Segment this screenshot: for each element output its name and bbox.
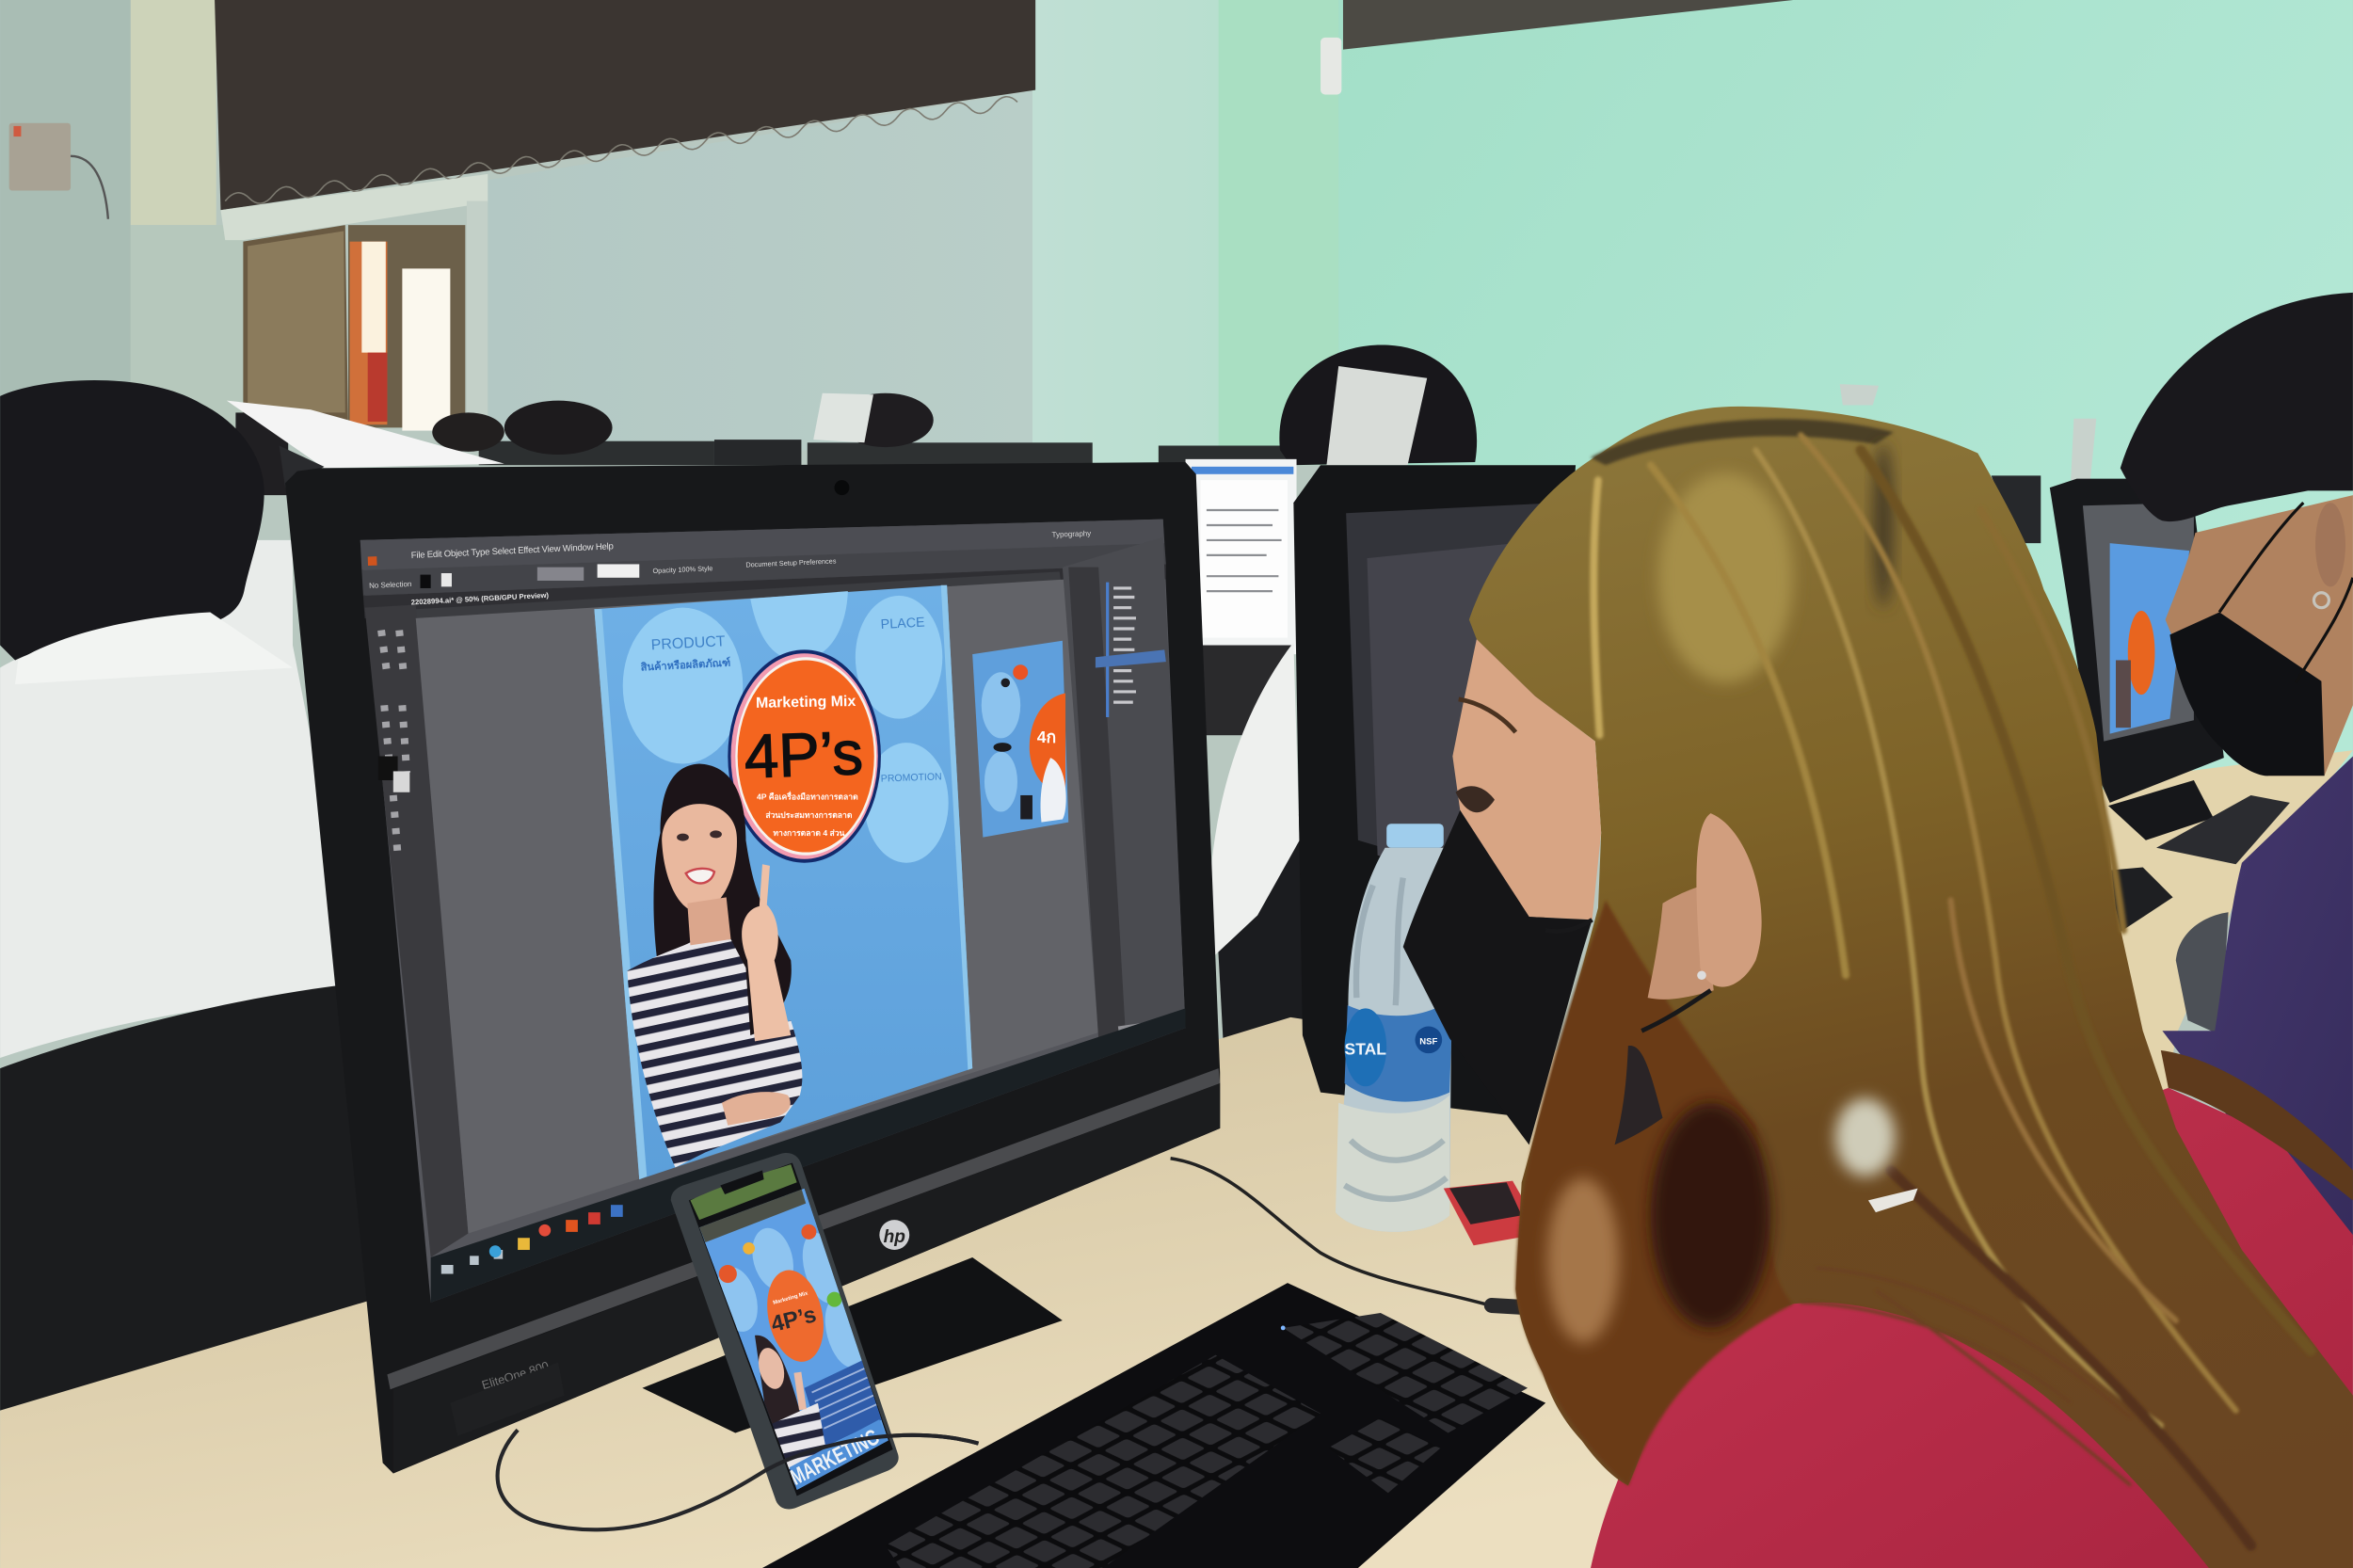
back heads <box>432 393 934 455</box>
webcam <box>835 480 849 495</box>
model label: EliteOne 800 <box>480 1358 551 1392</box>
circle: top <box>750 591 848 660</box>
hair strands <box>1593 435 2311 1545</box>
dark reddish lower lock <box>1515 901 1793 1485</box>
orange 4P's badge: ทางการตลาด 4 ส่วน <box>773 828 845 838</box>
wall beam and door frame <box>220 174 488 426</box>
woman's ear <box>1696 813 1762 987</box>
chair <box>0 983 393 1411</box>
curtain: left window <box>215 0 1035 210</box>
circle: promotion <box>864 743 949 863</box>
door <box>243 225 465 431</box>
mask ear loops <box>1545 920 1711 1031</box>
phone poster text block <box>804 1361 881 1446</box>
tools panel <box>365 604 469 1257</box>
light hair patch <box>1658 472 1793 682</box>
bottle label: STAL <box>1345 1040 1386 1059</box>
control bar: No Selection <box>369 580 412 590</box>
bottle label: NSF <box>1419 1037 1438 1048</box>
center student white sleeve <box>1209 642 1300 960</box>
raised hand and forearm <box>742 864 791 1041</box>
orange 4P's badge: ส่วนประสมทางการตลาด <box>765 810 853 820</box>
right back monitor stand <box>2108 780 2214 840</box>
wall-mounted device and wire <box>9 123 108 219</box>
menu bar: Typography <box>1051 529 1091 539</box>
hair part <box>1873 442 1894 608</box>
distant monitor back <box>280 445 324 488</box>
right panels <box>1063 537 1186 1038</box>
monitor brand logo bezel reflection <box>450 1363 565 1436</box>
windows taskbar <box>431 1008 1186 1303</box>
dark crown shadow <box>1591 419 1894 465</box>
right back monitor <box>2050 479 2224 803</box>
phone poster badge <box>767 1271 824 1362</box>
dark hair shadow near neck <box>1651 1103 1770 1328</box>
ruler <box>416 571 1061 621</box>
wall sensor <box>1321 38 1341 94</box>
right student face mask <box>2169 612 2325 776</box>
right desk section <box>1951 750 2353 1200</box>
charging cable <box>498 1430 979 1529</box>
far right monitor behind <box>1992 475 2041 543</box>
keyboard <box>762 1283 1545 1568</box>
back row monitors <box>479 440 1293 467</box>
neck <box>687 897 731 945</box>
phone poster badge: 4P’s <box>769 1302 819 1337</box>
woman's hair <box>1469 407 2353 1568</box>
woman's cheek by ear <box>1648 886 1714 1000</box>
left student head <box>0 380 264 660</box>
long dark hair <box>653 763 792 1056</box>
upper strands over the sweater shoulder <box>2161 1050 2353 1200</box>
right student face <box>2166 495 2353 776</box>
white collar <box>1835 1098 1918 1212</box>
control bar: Opacity 100% Style <box>652 564 713 575</box>
desk <box>0 1017 1951 1568</box>
phone poster badge: Marketing Mix <box>773 1290 809 1306</box>
circle: promotion: PROMOTION <box>881 771 942 785</box>
woman's black face mask <box>1403 810 1593 1144</box>
curtain: right window <box>1343 0 1793 50</box>
document tab bar <box>363 564 1166 618</box>
orange 4P's badge <box>728 649 881 863</box>
woman's face <box>1452 639 1601 920</box>
orange 4P's badge: 4P’s <box>744 718 864 791</box>
sheet of paper above left student <box>227 401 504 468</box>
grey canvas <box>416 579 1118 1233</box>
center student head with paper <box>1279 344 1477 465</box>
stand of main monitor <box>642 1257 1063 1433</box>
phone poster footer word: MARKETING <box>787 1424 884 1491</box>
control bar <box>361 543 1166 596</box>
right mask strap <box>2219 503 2353 682</box>
right student ear and earring <box>2313 503 2345 608</box>
circle: product: สินค้าหรือผลิตภัณฑ์ <box>640 656 731 674</box>
left student collar <box>15 612 293 684</box>
right student hair <box>2121 293 2353 521</box>
poster artboard <box>594 585 972 1179</box>
orange 4P's badge: 4P คือเครื่องมือทางการตลาด <box>757 791 858 802</box>
smartphone with poster on screen <box>671 1153 899 1509</box>
dark figure behind sheet <box>235 412 288 495</box>
striped top <box>628 939 802 1167</box>
bottle label <box>1345 998 1452 1102</box>
main monitor <box>285 462 1220 1474</box>
HP logo: hp <box>884 1227 905 1247</box>
document tab bar: 22028994.ai* @ 50% (RGB/GPU Preview) <box>411 591 550 606</box>
circle: product: PRODUCT <box>650 633 726 653</box>
HP logo <box>879 1220 909 1250</box>
background white document monitor <box>1186 459 1297 735</box>
phone poster footer band <box>790 1419 888 1490</box>
center student dark chair <box>1215 810 1305 1050</box>
folded arm <box>722 1092 791 1126</box>
grey sleeve of right student <box>2176 912 2229 1035</box>
monitor screen: Illustrator workspace <box>360 520 1186 1303</box>
control bar: Document Setup Preferences <box>745 556 837 569</box>
paper slips on right monitors <box>1840 384 2096 480</box>
mask lace tail <box>1615 1046 1663 1144</box>
right keyboards <box>2110 795 2290 935</box>
thin translucent hair patch near desk <box>1547 1177 1619 1343</box>
phone notch <box>720 1171 764 1194</box>
circle: product <box>623 608 743 763</box>
menu bar: File Edit Object Type Select Effect View Window Help <box>411 541 614 561</box>
menu bar <box>360 520 1164 570</box>
woman's red sweater <box>1591 1088 2353 1568</box>
monitor power cable <box>1171 1159 1500 1308</box>
eyes and mouth <box>677 830 722 883</box>
phone screen <box>699 1189 888 1491</box>
right student sweater <box>2162 757 2353 1245</box>
thumbnail poster <box>972 641 1068 838</box>
face <box>662 804 737 912</box>
redraw of cable over phone <box>765 1435 979 1470</box>
water bottle <box>1336 824 1453 1232</box>
pen on desk <box>1492 1305 1621 1313</box>
left student white shirt behind monitor <box>0 540 360 1058</box>
red power bank on desk <box>1444 1181 1543 1245</box>
thumbnail poster: 4ก <box>1037 728 1056 746</box>
woman on poster <box>628 763 802 1167</box>
circle: place: PLACE <box>880 616 925 632</box>
circle: place <box>856 596 942 719</box>
woman's eyebrow and eye <box>1456 699 1515 812</box>
orange 4P's badge: Marketing Mix <box>756 694 856 712</box>
bottle ridges <box>1345 878 1447 1199</box>
hair strands across sweater <box>1801 1268 2131 1485</box>
phone poster woman <box>754 1336 828 1489</box>
middle monitor <box>1293 465 1576 1118</box>
